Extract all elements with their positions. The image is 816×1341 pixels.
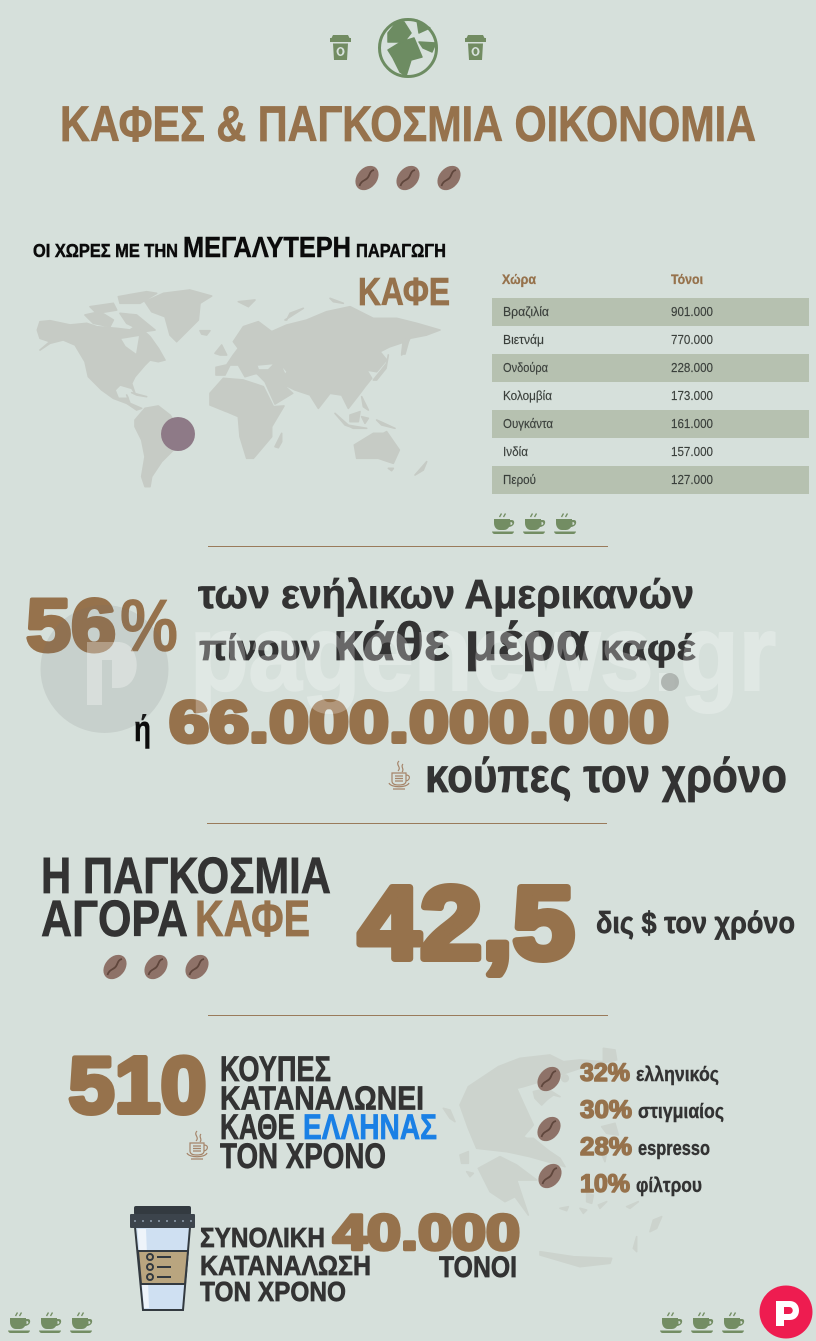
share: filter: φίλτρου: [636, 1175, 702, 1197]
icon: tea cups bottom left: [8, 1312, 92, 1333]
icon: takeaway cup left: [330, 35, 351, 60]
panel: Greek consumption: [68, 1040, 437, 1176]
share: espresso: [580, 1133, 710, 1161]
share: instant: 30%: [580, 1096, 632, 1124]
text: cups consumed by each Greek per year: ΚΑΤΑΝΑΛΩΝΕΙ: [220, 1080, 424, 1116]
panel: American consumption: [26, 571, 787, 803]
icon: steaming cup: [187, 1131, 207, 1159]
text: of American adults: των ενήλικων Αμερικανών: [198, 571, 694, 617]
table rows: Βιετνάμ: [503, 332, 544, 347]
heading: global market: ΚΑΦΕ: [195, 890, 310, 947]
stat: 66 billion: 66.000.000.000: [169, 690, 669, 755]
text: cups consumed by each Greek per year: ΤΟΝ ΧΡΟΝΟ: [220, 1137, 386, 1176]
icon: globe: [380, 20, 436, 76]
icon: three coffee beans: [351, 161, 465, 195]
text: drink coffee every day: πίνουν: [199, 627, 321, 668]
marker: Brazil: [161, 417, 195, 451]
stat: 510: 510: [68, 1040, 206, 1130]
icon: bean 2: [533, 1112, 565, 1146]
table rows: 901.000: [671, 304, 713, 319]
icon: three coffee beans: [99, 950, 213, 984]
text: total annual consumption: ΚΑΤΑΝΑΛΩΣΗ: [200, 1250, 371, 1281]
table rows: 770.000: [671, 332, 713, 347]
table header: Τόνοι: [671, 272, 703, 287]
map: Eurasia, Africa and Oceania: [210, 298, 440, 475]
panel: coffee type shares: [533, 1059, 724, 1198]
text: drink coffee every day: [199, 612, 696, 672]
share: filter: [580, 1170, 702, 1198]
stat: 40.000: 40.000: [333, 1204, 520, 1260]
table rows: 228.000: [671, 360, 713, 375]
stat: 56%: %: [120, 584, 178, 667]
heading: largest production: [33, 232, 446, 264]
map: Greece: [443, 1048, 662, 1267]
heading: largest production: ΠΑΡΑΓΩΓΗ: [356, 240, 446, 261]
table rows: 161.000: [671, 416, 713, 431]
share: espresso: 28%: [580, 1133, 632, 1161]
icon: bean 1: [533, 1062, 565, 1096]
table header: Χώρα: [502, 272, 537, 287]
share: Greek coffee: ελληνικός: [636, 1064, 719, 1086]
icon: takeaway coffee cup: [130, 1206, 195, 1310]
icon: bean 3: [534, 1159, 566, 1193]
text: drink coffee every day: καφέ: [600, 627, 696, 668]
heading: global market: Η ΠΑΓΚΟΣΜΙΑ: [41, 847, 331, 904]
table rows: 157.000: [671, 444, 713, 459]
panel: global coffee market: [41, 847, 795, 984]
share: Greek coffee: 32%: [580, 1059, 630, 1087]
heading: largest production: ΜΕΓΑΛΥΤΕΡΗ: [183, 232, 351, 264]
icon: takeaway cup right: [465, 35, 486, 60]
text: total annual consumption: [200, 1222, 371, 1307]
heading: global market: [41, 847, 331, 947]
text: cups consumed by each Greek per year: ΕΛΛΗΝΑΣ: [303, 1108, 437, 1147]
text: cups consumed by each Greek per year: ΚΟΥΠΕΣ: [220, 1050, 331, 1089]
map: Americas and Greenland: [37, 290, 212, 487]
header icons: [330, 20, 486, 76]
stat: 56%: [26, 584, 178, 667]
heading: largest production: ΟΙ ΧΩΡΕΣ ΜΕ ΤΗΝ: [33, 240, 178, 261]
heading: coffee: ΚΑΦΕ: [358, 271, 450, 314]
table rows: Ονδούρα: [503, 360, 548, 375]
text: cups consumed by each Greek per year: ΚΑΘΕ: [220, 1108, 295, 1147]
share: instant: [580, 1096, 724, 1124]
watermark: pagenews.gr: [40, 592, 776, 733]
stat: 56%: 56: [26, 584, 116, 667]
text: total annual consumption: ΤΟΝ ΧΡΟΝΟ: [200, 1276, 346, 1307]
table rows: Βραζιλία: [503, 304, 549, 319]
share: filter: 10%: [580, 1170, 630, 1198]
text: or: ή: [134, 708, 151, 749]
share: espresso: espresso: [638, 1138, 710, 1160]
heading: global market: ΑΓΟΡΑ: [41, 890, 188, 947]
table rows: 173.000: [671, 388, 713, 403]
text: total annual consumption: ΣΥΝΟΛΙΚΗ: [200, 1222, 325, 1253]
panel: total consumption: [130, 1204, 520, 1310]
table header: [502, 272, 703, 287]
share: instant: στιγμιαίος: [638, 1101, 724, 1123]
share: Greek coffee: [580, 1059, 719, 1087]
logo: red P badge: [760, 1286, 812, 1338]
table rows: Ουγκάντα: [503, 416, 553, 431]
icon: steaming cup: [389, 761, 409, 789]
panel: production table: [492, 272, 809, 494]
text: cups consumed by each Greek per year: [220, 1050, 437, 1176]
icon: tea cups bottom right: [660, 1312, 744, 1333]
table rows: Περού: [503, 472, 536, 487]
stat: 42,5: 42,5: [358, 866, 574, 980]
icon: three tea cups under table: [492, 514, 576, 534]
table rows: [492, 298, 809, 494]
table rows: Ινδία: [503, 444, 528, 459]
panel: world map of producers: [37, 290, 440, 487]
table rows: 127.000: [671, 472, 713, 487]
text: tonnes: ΤΟΝΟΙ: [439, 1251, 517, 1284]
text: drink coffee every day: κάθε μέρα: [333, 612, 589, 672]
table rows: Κολομβία: [503, 388, 552, 403]
